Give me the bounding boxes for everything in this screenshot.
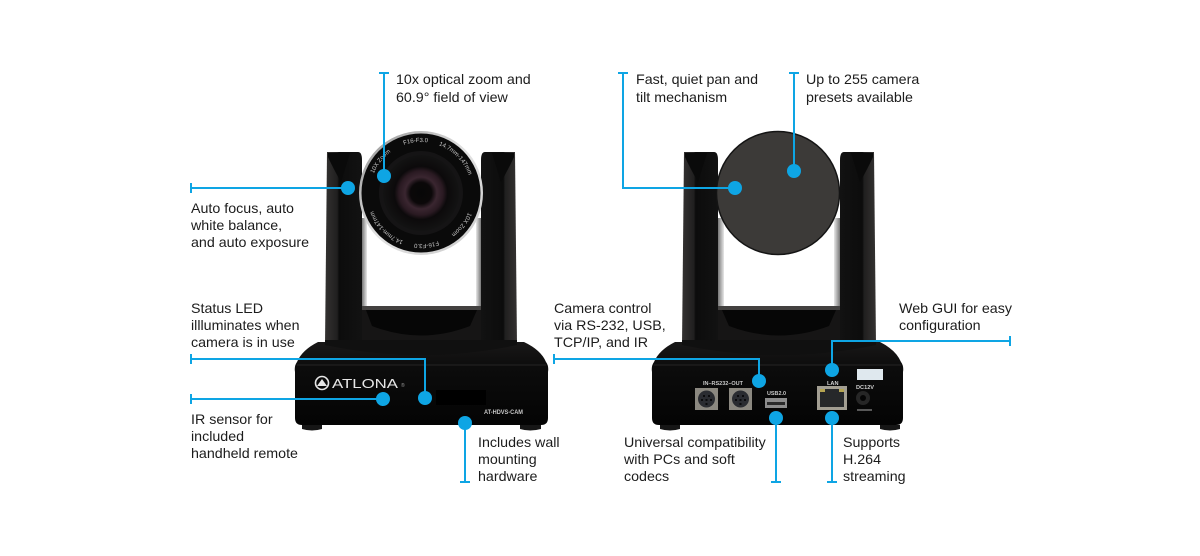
neck	[718, 306, 840, 348]
rear camera	[652, 132, 903, 430]
left arm	[682, 152, 718, 345]
callout: camera control: Camera control	[554, 301, 651, 317]
right arm	[840, 152, 876, 345]
callout: presets: Up to 255 camera	[806, 72, 919, 88]
callout: status LED: camera is in use	[191, 335, 295, 351]
base edge	[297, 364, 546, 366]
right arm shadow	[492, 153, 514, 182]
callout: pan and tilt	[618, 72, 758, 195]
callout: optical zoom	[377, 72, 531, 183]
callout: universal compatibility	[623, 411, 783, 485]
callout: IR sensor: IR sensor for	[191, 412, 273, 428]
brand logo	[316, 376, 405, 391]
callout: presets	[787, 72, 919, 178]
callout: optical zoom: 60.9° field of view	[396, 90, 509, 106]
lens: F16-F3.0	[414, 241, 439, 248]
pedestal	[682, 340, 876, 355]
brand logo: ATLONA	[332, 376, 398, 391]
callout: universal compatibility: with PCs and soft	[623, 452, 735, 468]
front camera	[294, 131, 548, 430]
callout: universal compatibility: Universal compatibility	[624, 435, 767, 451]
right arm	[481, 152, 517, 345]
callout: wall mounting: mounting	[478, 452, 537, 468]
lens: 10X Zoom	[452, 212, 472, 236]
lens markings: 10X Zoom	[370, 150, 390, 174]
LAN port	[817, 386, 847, 410]
base feet	[660, 425, 900, 430]
RS-232 in port	[695, 388, 718, 410]
callout: IR sensor: included	[191, 429, 244, 445]
callout: camera control: via RS-232, USB,	[554, 318, 666, 334]
USB label: USB2.0	[767, 391, 786, 397]
callout: status LED	[191, 301, 432, 405]
pedestal	[325, 340, 517, 355]
lens	[359, 131, 483, 255]
callout: H.264: H.264	[843, 452, 881, 468]
callout: auto focus: and auto exposure	[191, 235, 309, 251]
base feet	[302, 425, 541, 430]
callout: auto focus	[190, 181, 355, 251]
callout: presets: presets available	[806, 90, 913, 106]
LAN label: LAN	[827, 381, 838, 387]
callout: H.264: Supports	[843, 435, 900, 451]
callout: web GUI	[825, 301, 1013, 377]
left arm shadow	[328, 153, 350, 182]
callout: auto focus: white balance,	[190, 218, 282, 234]
right arm shadow	[851, 153, 873, 182]
callout: camera control	[554, 301, 766, 388]
camera base	[295, 342, 548, 425]
callout: web GUI: Web GUI for easy	[899, 301, 1013, 317]
lens: 14.7mm-147mm	[439, 142, 472, 175]
brand logo: ®	[401, 382, 405, 389]
callout: camera control: TCP/IP, and IR	[554, 335, 648, 351]
USB port	[765, 398, 787, 408]
camera base	[652, 342, 903, 425]
window gray edges	[718, 218, 840, 307]
lens: 14.7mm-147mm	[370, 211, 403, 244]
base edge	[654, 364, 901, 366]
callout: H.264	[825, 411, 906, 485]
window gray edges	[362, 218, 481, 307]
callout: H.264: streaming	[843, 469, 906, 485]
neck	[362, 306, 481, 348]
callout: optical zoom: 10x optical zoom and	[396, 72, 531, 88]
callout: web GUI: configuration	[899, 318, 981, 334]
callout: IR sensor	[191, 392, 390, 462]
callout: IR sensor: handheld remote	[191, 446, 298, 462]
lens: F16-F3.0	[403, 138, 428, 145]
DC jack	[856, 391, 872, 410]
sticker	[857, 369, 883, 380]
left arm shadow	[685, 153, 707, 182]
model label: AT-HDVS-CAM	[484, 409, 523, 416]
callout: auto focus: Auto focus, auto	[191, 201, 294, 217]
IR window	[436, 390, 486, 405]
callout: wall mounting: hardware	[478, 469, 537, 485]
callout: wall mounting: Includes wall	[478, 435, 560, 451]
callout: pan and tilt: Fast, quiet pan and	[636, 72, 758, 88]
DC label: DC12V	[856, 385, 874, 391]
left arm	[325, 152, 362, 345]
rear disc	[716, 132, 840, 254]
callout: status LED: Status LED	[191, 301, 263, 317]
callout: status LED: illluminates when	[191, 318, 300, 334]
callout: wall mounting	[458, 416, 560, 485]
callout: pan and tilt: tilt mechanism	[636, 90, 727, 106]
callout: universal compatibility: codecs	[624, 469, 669, 485]
RS-232 label: IN–RS232–OUT	[703, 381, 744, 387]
RS-232 out port	[729, 388, 752, 410]
